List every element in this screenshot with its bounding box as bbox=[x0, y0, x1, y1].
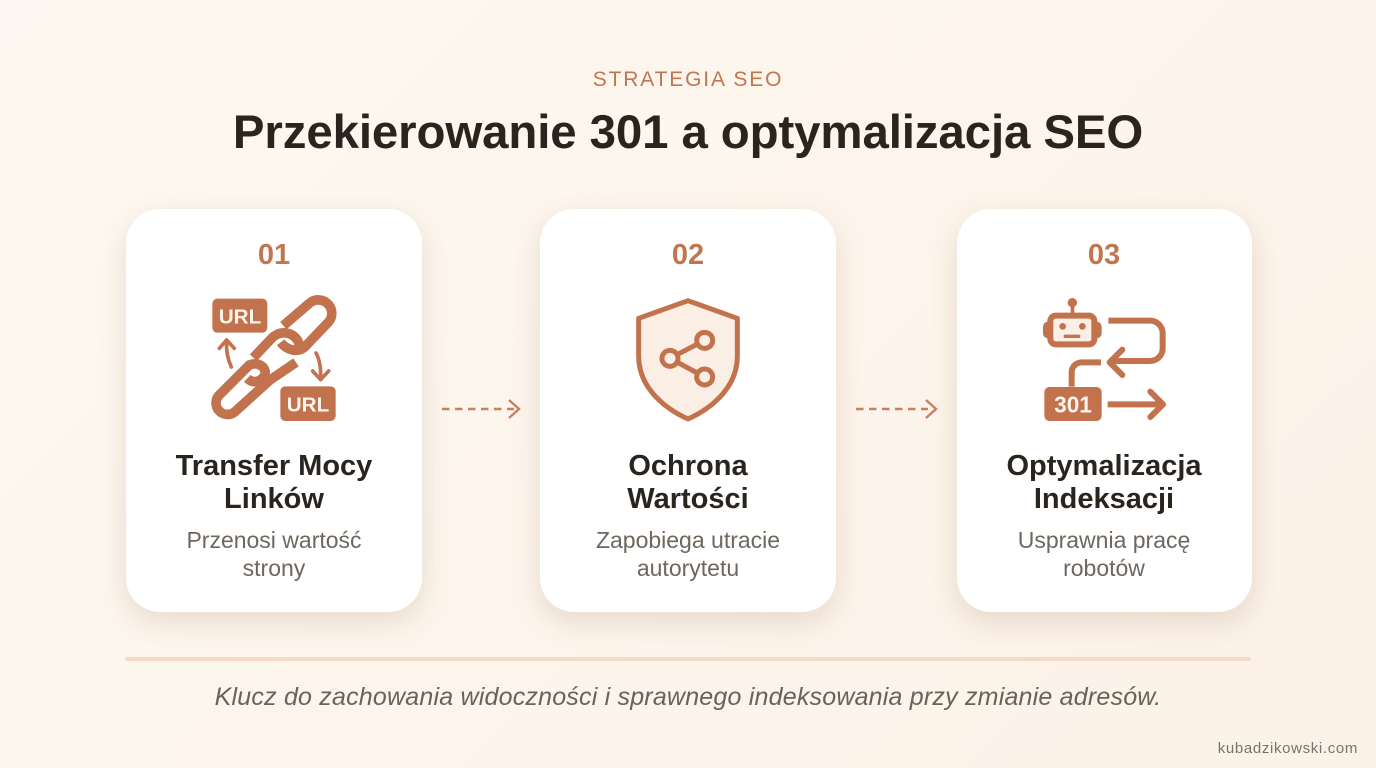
card 1 heading: Transfer Mocy bbox=[176, 450, 372, 482]
icon: chain links with URL tags bbox=[211, 295, 337, 421]
card 1 heading: Linków bbox=[224, 483, 324, 515]
panel: card 2 background bbox=[540, 209, 836, 612]
card 3 description: Usprawnia pracę bbox=[1018, 527, 1190, 553]
icon: chain links with URL tags: URL bbox=[287, 393, 329, 416]
card 2 description: autorytetu bbox=[637, 555, 739, 581]
icon: chain links with URL tags: URL bbox=[219, 305, 261, 328]
card 3 description: robotów bbox=[1063, 555, 1145, 581]
card 3 heading bbox=[1006, 450, 1202, 515]
card 1 description: strony bbox=[243, 555, 305, 581]
arrow: card 2 to 3 bbox=[856, 399, 938, 419]
card 1 description: Przenosi wartość bbox=[186, 527, 362, 553]
panel: card 1 background bbox=[126, 209, 422, 612]
card 2 heading: Ochrona bbox=[628, 450, 748, 482]
card 3 heading: Indeksacji bbox=[1034, 483, 1174, 515]
card 1 description bbox=[186, 527, 362, 581]
eyebrow label: STRATEGIA SEO bbox=[593, 68, 783, 91]
title: Przekierowanie 301 a optymalizacja SEO bbox=[233, 106, 1143, 159]
watermark: kubadzikowski.com bbox=[1218, 740, 1358, 757]
card 2 description: Zapobiega utracie bbox=[596, 527, 780, 553]
card 2 heading bbox=[627, 450, 749, 515]
arrow: card 1 to 2 bbox=[442, 399, 521, 419]
card 1 heading bbox=[176, 450, 372, 515]
card 2 heading: Wartości bbox=[627, 483, 749, 515]
divider line bbox=[125, 657, 1251, 661]
panel: card 3 background bbox=[957, 209, 1252, 612]
icon: robot with 301 redirect flow: 301 bbox=[1054, 391, 1092, 417]
icon: shield with share symbol bbox=[636, 298, 740, 422]
card 3 description bbox=[1018, 527, 1190, 581]
card 2 number: 02 bbox=[672, 239, 704, 271]
card 1 number: 01 bbox=[258, 239, 290, 271]
card 2 description bbox=[596, 527, 780, 581]
card 3 number: 03 bbox=[1088, 239, 1120, 271]
icon: robot with 301 redirect flow bbox=[1043, 298, 1166, 421]
footer takeaway text: Klucz do zachowania widoczności i sprawnego indeksowania przy zmianie adresów. bbox=[215, 683, 1161, 711]
card 3 heading: Optymalizacja bbox=[1006, 450, 1202, 482]
